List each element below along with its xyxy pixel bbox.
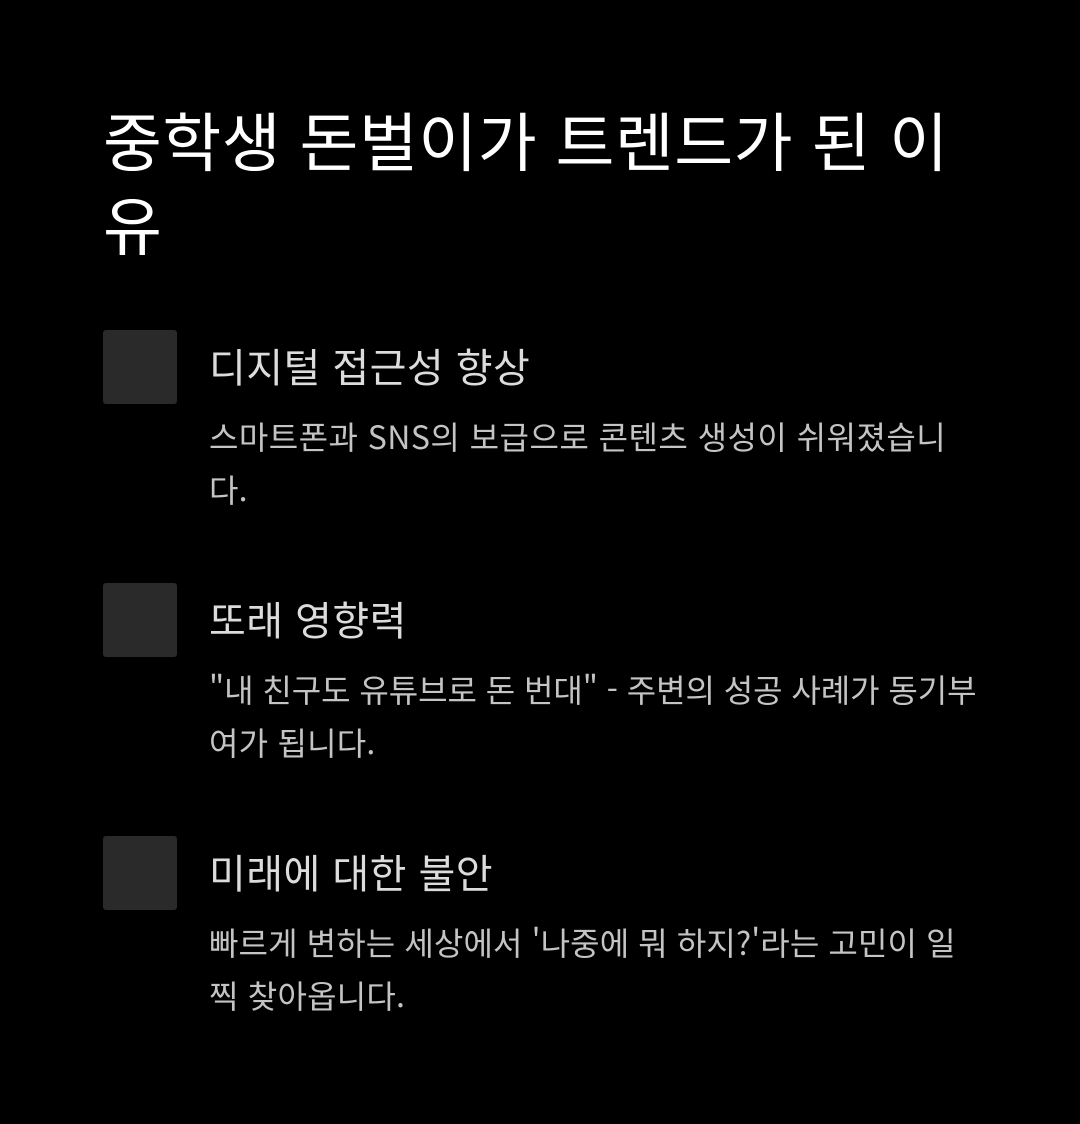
heading 3: 미래에 대한 불안 bbox=[209, 842, 493, 900]
text 2: "내 친구도 유튜브로 돈 번대" - 주변의 성공 사례가 동기부 bbox=[209, 666, 976, 712]
text 3: 찍 찾아옵니다. bbox=[209, 972, 405, 1018]
title bbox=[103, 93, 949, 269]
text 1: 다. bbox=[209, 466, 248, 512]
title: 중학생 돈벌이가 트렌드가 된 이 bbox=[103, 93, 949, 185]
icon placeholder 3 bbox=[103, 836, 177, 910]
text 3 bbox=[209, 919, 956, 1018]
title: 유 bbox=[103, 177, 162, 269]
text 1 bbox=[209, 413, 946, 512]
text 3: 빠르게 변하는 세상에서 '나중에 뭐 하지?'라는 고민이 일 bbox=[209, 919, 956, 965]
heading 1: 디지털 접근성 향상 bbox=[209, 336, 530, 394]
text 2: 여가 됩니다. bbox=[209, 719, 376, 765]
icon placeholder 2 bbox=[103, 583, 177, 657]
text 2 bbox=[209, 666, 976, 765]
heading 2: 또래 영향력 bbox=[209, 589, 407, 647]
text 1: 스마트폰과 SNS의 보급으로 콘텐츠 생성이 쉬워졌습니 bbox=[209, 413, 946, 459]
icon placeholder 1 bbox=[103, 330, 177, 404]
